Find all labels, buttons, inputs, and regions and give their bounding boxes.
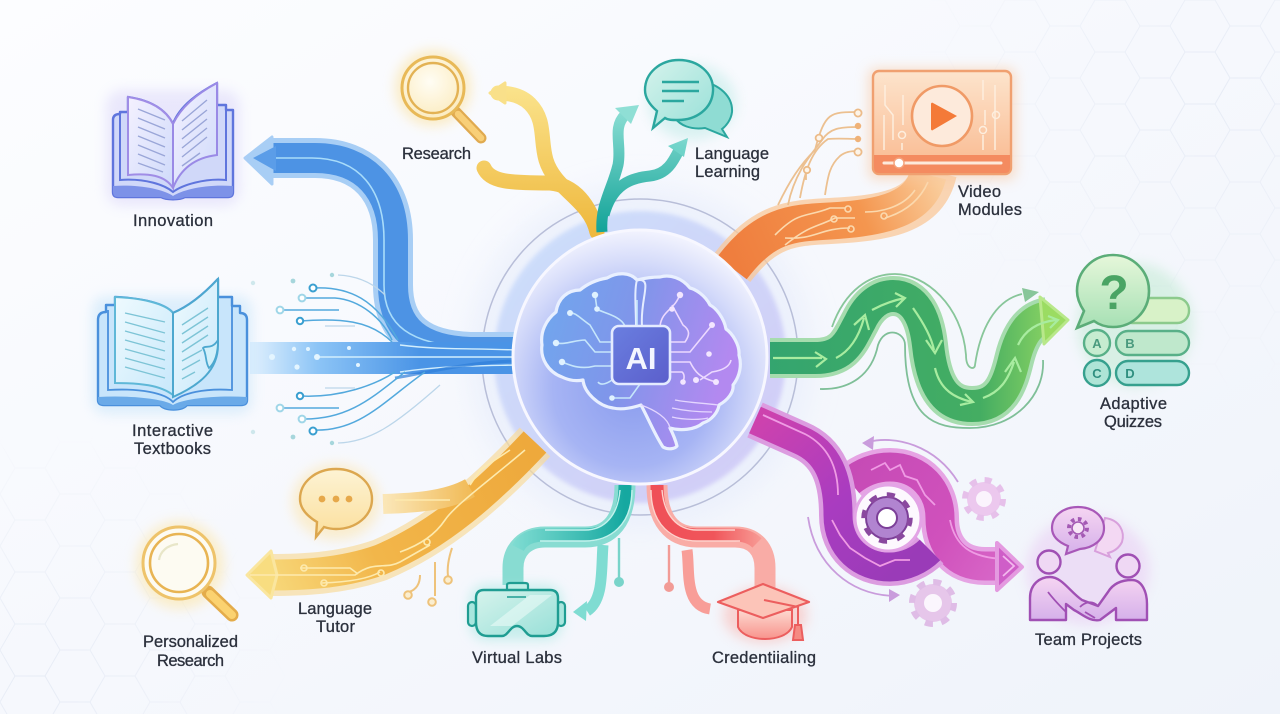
icon: VR headset <box>468 583 565 640</box>
icon: magnifying glass <box>136 521 232 615</box>
panel: Research <box>395 50 481 163</box>
icon: quiz bubble and answer options <box>1077 255 1193 387</box>
label: Video Modules: Modules <box>958 201 1022 219</box>
panel: Language Tutor <box>292 464 380 636</box>
arrow: orange circuit band to Video Modules <box>732 109 934 268</box>
panel: Interactive Textbooks <box>92 279 252 458</box>
label: Interactive Textbooks: Textbooks <box>134 440 211 458</box>
icon: chat bubbles <box>645 60 736 140</box>
label: Language Tutor: Language <box>298 600 372 618</box>
arrow: data beam to Interactive Textbooks <box>250 273 515 445</box>
panel: Innovation <box>106 83 240 230</box>
icon: small gear right <box>965 480 1003 518</box>
label: Language Learning: Learning <box>695 163 760 181</box>
label: Research: Research <box>402 145 471 163</box>
arrow: teal branch to Language Learning <box>602 105 688 232</box>
icon: AI chip: AI <box>626 341 656 376</box>
hub halo and outer ring <box>468 185 812 529</box>
icon: magnifying glass <box>395 50 481 138</box>
central AI disc <box>512 229 768 485</box>
arrow: coral branch to Credentialing <box>651 485 765 609</box>
icon: quiz bubble and answer options: A <box>1092 336 1102 351</box>
label: Adaptive Quizzes: Quizzes <box>1104 413 1162 431</box>
label: Adaptive Quizzes: Adaptive <box>1100 395 1167 413</box>
panel: Credentialing <box>712 584 816 667</box>
panel: Adaptive Quizzes <box>1077 255 1193 431</box>
label: Personalized Research <box>143 633 238 670</box>
label: Language Learning <box>695 145 769 181</box>
label: Personalized Research: Research <box>157 652 224 670</box>
icon: team handshake with thought bubbles <box>1026 507 1150 625</box>
icon: AI chip <box>612 326 670 384</box>
icon: quiz bubble and answer options: ? <box>1099 267 1129 320</box>
icon: graduation cap <box>718 584 809 643</box>
label: Video Modules <box>958 183 1022 219</box>
label: Credentiialing: Credentiialing <box>712 649 816 667</box>
icon: video player <box>868 68 1016 180</box>
label: Language Tutor: Tutor <box>316 618 356 636</box>
arrow: green winding path to Adaptive Quizzes <box>770 274 1068 428</box>
icon: quiz bubble and answer options: B <box>1125 336 1135 351</box>
label: Language Tutor <box>298 600 372 636</box>
label: Language Learning: Language <box>695 145 769 163</box>
icon: quiz bubble and answer options: C <box>1092 366 1102 381</box>
panel: Language Learning <box>645 60 769 181</box>
label: Adaptive Quizzes <box>1100 395 1167 431</box>
label: Virtual Labs: Virtual Labs <box>472 649 562 667</box>
label: Innovation: Innovation <box>133 212 213 230</box>
panel: Virtual Labs <box>468 583 565 667</box>
arrow: golden circuit band to Language Tutor <box>247 442 535 606</box>
icon: central gear <box>864 495 910 541</box>
icon: quiz bubble and answer options: D <box>1125 366 1135 381</box>
icon: open book <box>106 83 240 206</box>
arrow: blue path to Innovation <box>245 137 515 352</box>
panel: Personalized Research <box>136 521 238 670</box>
icon: small gear bottom <box>912 582 954 624</box>
label: Team Projects: Team Projects <box>1035 631 1142 649</box>
label: Interactive Textbooks <box>132 422 213 458</box>
arrow: yellow branch to Research <box>484 83 597 232</box>
icon: speech bubble with dots <box>292 464 380 540</box>
panel: Video Modules <box>868 68 1022 219</box>
icon: brain <box>542 274 740 449</box>
arrow: teal branch to Virtual Labs <box>513 485 632 621</box>
label: Personalized Research: Personalized <box>143 633 238 651</box>
label: Video Modules: Video <box>958 183 1001 201</box>
icon: open book with curling page <box>92 279 252 414</box>
arrow: purple gear loop to Team Projects <box>755 415 1022 602</box>
label: Interactive Textbooks: Interactive <box>132 422 213 440</box>
panel: Team Projects <box>1026 507 1150 649</box>
